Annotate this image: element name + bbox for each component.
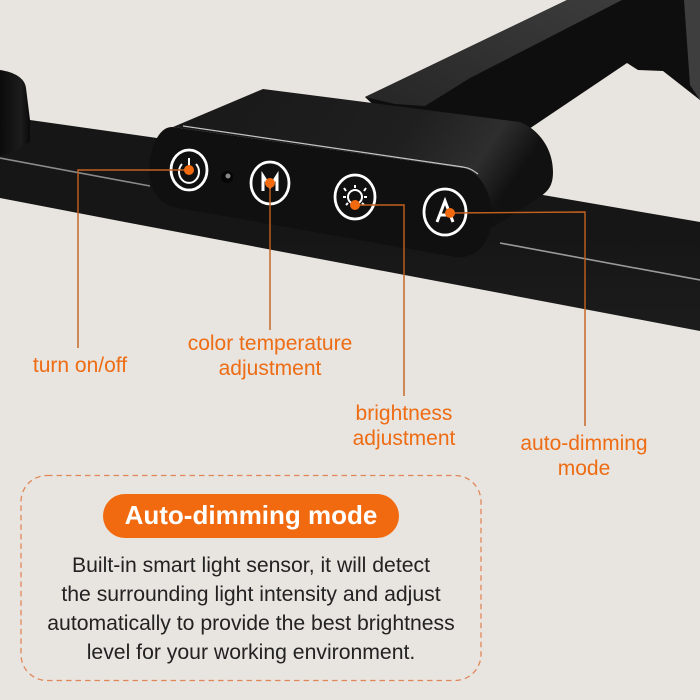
body text: level for your working environment. <box>87 641 415 664</box>
panel: auto-dimming mode <box>21 476 481 680</box>
body text: automatically to provide the best brightness <box>47 612 455 635</box>
icon: light sensor <box>221 171 233 183</box>
icon: auto button <box>424 189 466 235</box>
icon: power button <box>171 150 207 190</box>
label: auto-dimming mode <box>520 432 648 480</box>
label: auto-dimming mode: mode <box>558 457 610 480</box>
product: lamp bar <box>0 120 700 331</box>
icon: brightness button <box>335 175 375 219</box>
body text: the surrounding light intensity and adjust <box>61 583 441 606</box>
icon: M button <box>251 162 289 204</box>
label: color temperature adjustment: color temperature <box>188 332 352 355</box>
heading pill <box>103 494 399 538</box>
product: control module <box>149 89 553 257</box>
label: turn on/off: turn on/off <box>33 354 127 377</box>
callout line: brightness <box>350 200 404 396</box>
body text <box>47 554 455 664</box>
label: auto-dimming mode: auto-dimming <box>520 432 648 455</box>
product: lamp arm <box>365 0 700 135</box>
label: color temperature adjustment <box>188 332 352 380</box>
label: brightness adjustment: adjustment <box>353 427 456 450</box>
heading pill: Auto-dimming mode <box>125 500 377 530</box>
label: brightness adjustment: brightness <box>356 402 452 425</box>
callout line: turn on/off <box>78 165 194 348</box>
callout line: auto-dimming <box>445 208 585 426</box>
body text: Built-in smart light sensor, it will detect <box>72 554 430 577</box>
product: left knob <box>0 70 30 156</box>
label: color temperature adjustment: adjustment <box>219 357 322 380</box>
label: brightness adjustment <box>353 402 456 450</box>
callout line: color temperature <box>265 178 275 330</box>
